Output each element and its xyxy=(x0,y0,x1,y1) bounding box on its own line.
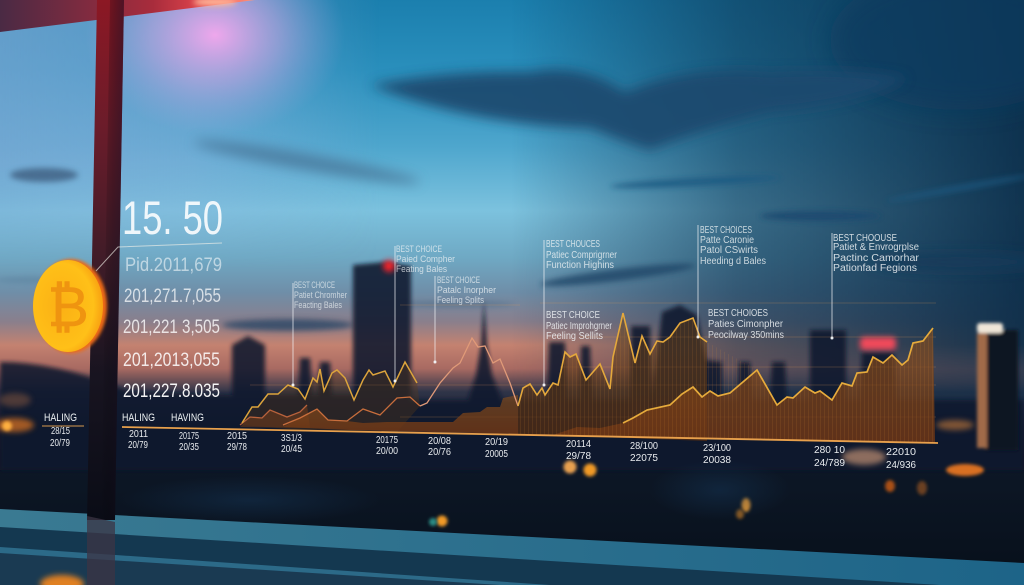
date axis labels: 20175 xyxy=(179,431,199,442)
callout 8: Pactinc Camorhar xyxy=(833,253,920,264)
chart grid lines xyxy=(250,303,936,417)
pillar reflection xyxy=(87,516,115,585)
headline price: 15. 50 xyxy=(122,191,223,244)
area: main series xyxy=(518,313,707,441)
callout 8: Pationfad Fegions xyxy=(833,263,917,274)
halving labels: HAVING xyxy=(171,412,204,424)
area: mid series xyxy=(283,395,518,434)
halving labels: HALING xyxy=(122,412,155,424)
date axis labels: 24/789 xyxy=(814,458,845,469)
bokeh lights xyxy=(0,393,984,526)
clouds xyxy=(0,70,1024,331)
callout 6: BEST CHOICES xyxy=(700,225,752,236)
date axis labels: 20114 xyxy=(566,439,591,450)
date axis labels: 20/45 xyxy=(281,444,302,455)
date axis labels: 20/08 xyxy=(428,436,451,447)
callout 6: Patte Caronie xyxy=(700,235,754,246)
callout 2: Feating Bales xyxy=(396,264,447,275)
coin connector xyxy=(96,243,222,271)
callout 1: Feacting Bales xyxy=(294,300,342,311)
date axis labels: 20/79 xyxy=(50,438,70,449)
callout 2: Paied Compher xyxy=(396,254,455,265)
bitcoin coin xyxy=(33,259,107,353)
callout 4 xyxy=(546,239,618,271)
date axis labels: 3S1/3 xyxy=(281,433,302,444)
callout 8: BEST CHOOUSE xyxy=(833,233,897,244)
red beacons xyxy=(383,260,896,350)
callout 2 xyxy=(396,244,455,275)
callout 1 xyxy=(294,280,347,311)
window frame beam xyxy=(0,0,255,32)
area: small left series xyxy=(240,405,310,428)
price panel xyxy=(122,191,223,402)
callout 6: Patol CSwirts xyxy=(700,245,758,256)
callout 5 xyxy=(546,310,613,342)
date axis labels: 29/78 xyxy=(227,442,247,453)
price rows xyxy=(123,255,222,402)
area chart xyxy=(240,310,936,443)
callout 3: Patalc Inorpher xyxy=(437,285,496,296)
area: front series xyxy=(553,328,935,443)
date axis labels: 2011 xyxy=(129,429,148,440)
date axis labels: 29/78 xyxy=(566,451,591,462)
callout leader lines xyxy=(292,225,833,386)
line: primary series left xyxy=(242,362,417,423)
line: mid series xyxy=(283,397,420,425)
area: back series xyxy=(242,362,420,432)
line: primary series centre xyxy=(518,313,707,406)
line: primary series right xyxy=(623,328,933,423)
background: sunset sky xyxy=(0,0,1024,426)
date axis labels: 22075 xyxy=(630,453,658,464)
callout 4: BEST CHOUCES xyxy=(546,239,600,250)
right tower xyxy=(977,323,1018,450)
price rows: Pid.2011,679 xyxy=(125,255,222,276)
callout 3 xyxy=(437,275,496,306)
date axis labels: 20/79 xyxy=(128,440,148,451)
line: peak series xyxy=(420,338,518,406)
callout 5: BEST CHOICE xyxy=(546,310,600,321)
callout 5: Feeling Sellits xyxy=(546,331,603,342)
price rows: 201,221 3,505 xyxy=(123,317,220,338)
date axis labels: 20005 xyxy=(485,449,508,460)
callout 8 xyxy=(833,233,920,274)
halving labels xyxy=(44,412,204,424)
callout 1: Patiet Chromher xyxy=(294,290,347,301)
date axis labels: 20/76 xyxy=(428,447,451,458)
price rows: 201,2013,055 xyxy=(123,350,220,371)
chart baseline xyxy=(122,427,938,443)
callout 6 xyxy=(700,225,766,267)
city skyline xyxy=(0,262,1024,470)
callout 1: BEST CHOICE xyxy=(294,280,335,291)
area hatch xyxy=(515,310,936,442)
price rows: 201,227.8.035 xyxy=(123,381,220,402)
callout 3: Feeling Splits xyxy=(437,295,484,306)
date axis labels: 20/00 xyxy=(376,446,398,457)
date axis labels: 22010 xyxy=(886,447,916,458)
date axis labels: 28/15 xyxy=(51,426,70,437)
callout 4: Patiec Comprigrner xyxy=(546,250,618,261)
date axis labels: 20/35 xyxy=(179,442,199,453)
date axis labels: 20175 xyxy=(376,435,398,446)
halving labels: HALING xyxy=(44,412,77,424)
callout 2: BEST CHOICE xyxy=(396,244,442,255)
date axis labels: 28/100 xyxy=(630,441,658,452)
callout 7: BEST CHOIOES xyxy=(708,308,768,319)
callout 5: Patiec Improhgrner xyxy=(546,321,613,332)
callout 3: BEST CHOICE xyxy=(437,275,480,286)
window ledge / floor xyxy=(0,509,1024,585)
callout 7: Peocilway 350mins xyxy=(708,330,784,341)
date axis labels: 23/100 xyxy=(703,443,731,454)
bitcoin symbol: ₿ xyxy=(47,275,89,340)
window frame pillar xyxy=(87,0,124,520)
callout 8: Patiet & Envrogrplse xyxy=(833,242,919,253)
date axis labels: 280 10 xyxy=(814,445,845,456)
callout 7 xyxy=(708,308,784,341)
callout 6: Heeding d Bales xyxy=(700,256,766,267)
callout 4: Function Highins xyxy=(546,260,614,271)
date axis labels: 20038 xyxy=(703,455,731,466)
sun flare xyxy=(193,0,237,6)
price rows: 201,271.7,055 xyxy=(124,286,221,307)
date axis labels: 2015 xyxy=(227,431,247,442)
date axis labels: 20/19 xyxy=(485,437,508,448)
line: lower series left xyxy=(240,405,307,425)
left baseline xyxy=(42,425,84,427)
date axis labels xyxy=(50,426,916,471)
date axis labels: 24/936 xyxy=(886,460,916,471)
callout 7: Paties Cimonpher xyxy=(708,319,784,330)
